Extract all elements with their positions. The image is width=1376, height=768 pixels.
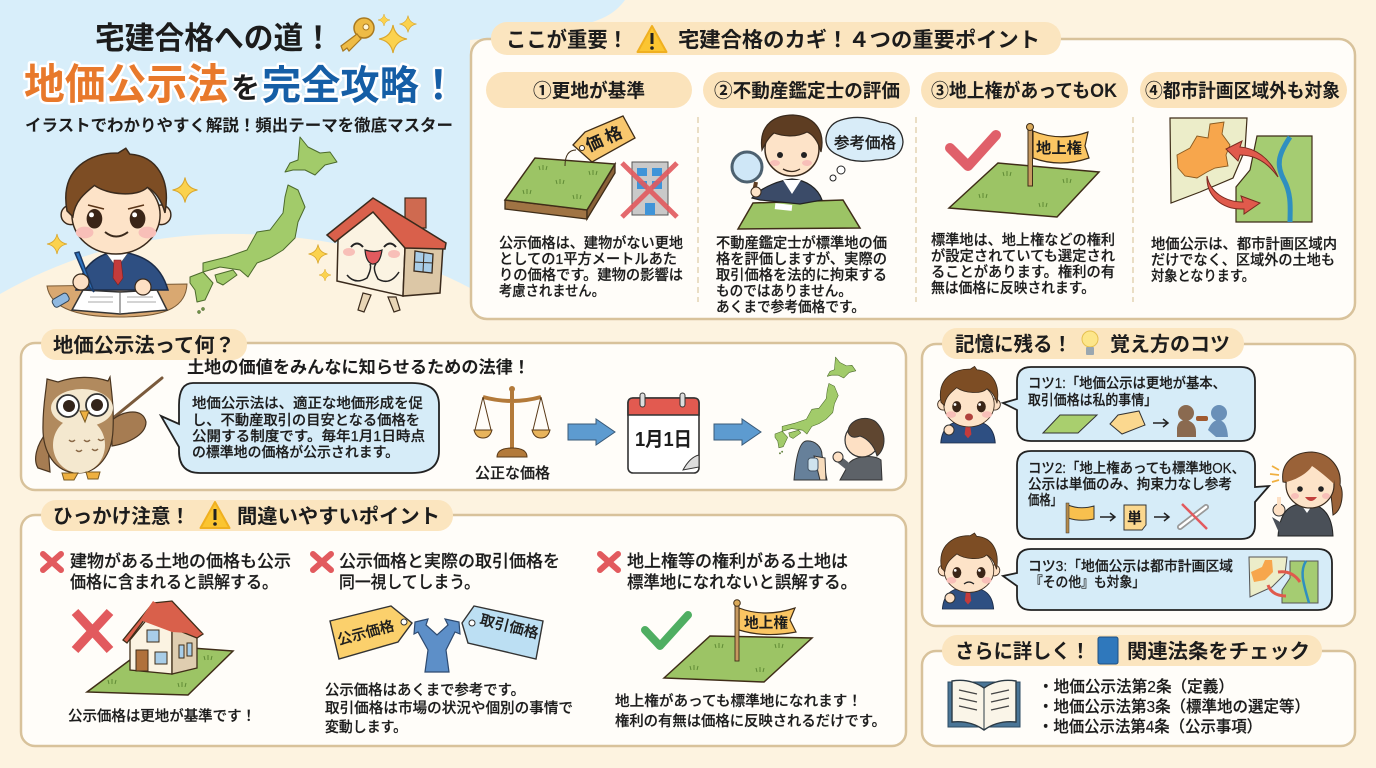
point 3 text: が設定されていても選定され [931, 247, 1115, 265]
callout: law explanation [161, 383, 439, 473]
point 1 text [499, 234, 683, 300]
panel: memory tips [922, 328, 1355, 626]
heading: common mistakes [41, 500, 453, 531]
heading: key points: 宅建合格のカギ！４つの重要ポイント [678, 29, 1040, 52]
tip 1 [938, 366, 1255, 443]
tip 3 [938, 533, 1332, 610]
heading: what is the law: 地価公示法って何？ [53, 334, 235, 357]
icon: calendar 1 January [628, 393, 699, 473]
subtitle: イラストでわかりやすく解説！頻出テーマを徹底マスター [25, 116, 453, 135]
point 4 heading [1140, 72, 1347, 108]
point 1 heading: ①更地が基準 [533, 79, 645, 102]
panel: common mistakes [21, 500, 906, 746]
point 4 text: だけでなく、区域外の土地も [1151, 252, 1335, 269]
mistake 2: 公示価格はあくまで参考です。 [325, 682, 525, 699]
callout: tip 2: コツ2:「地上権あっても標準地OK、 [1028, 460, 1245, 477]
point 2 text [716, 234, 887, 316]
heading: memory tips: 記憶に残る！ [955, 332, 1072, 356]
mistake 3: 地上権があっても標準地になれます！ [615, 692, 862, 710]
point 1 text: りの価格です。建物の影響は [499, 267, 683, 284]
illustration: vacant land with price tag: 価格 [583, 123, 625, 156]
illustration: flag on land with check [949, 124, 1099, 217]
callout: tip 1 [1003, 367, 1255, 441]
point 1 [486, 72, 692, 300]
illustration: two price tags and fork arrow: 公示価格 [336, 617, 397, 649]
point 1 text: 考慮されません。 [499, 283, 605, 300]
hero illustration: smiling house [308, 198, 446, 312]
mistake 3: 標準地になれないと誤解する。 [627, 573, 857, 592]
mistake 2: 取引価格は市場の状況や個別の事情で [325, 699, 573, 717]
title line 2: を [231, 73, 260, 105]
title line 2: 完全攻略！ [262, 64, 458, 108]
illustration: two price tags and fork arrow: 取引価格 [478, 611, 541, 643]
icon: key [341, 18, 374, 51]
mistake 1: 建物がある土地の価格も公示 [70, 551, 291, 571]
callout: law explanation: 公開する制度です。毎年1月1日時点 [192, 428, 425, 445]
arrow [568, 419, 615, 445]
title line 1: 宅建合格への道！ [95, 21, 333, 56]
heading: key points [491, 22, 1061, 55]
illustration: appraiser with magnifier: 参考価格 [834, 134, 896, 152]
point 4 heading: ④都市計画区域外も対象 [1145, 79, 1340, 102]
icon: boy speaking [938, 366, 1000, 443]
list of law articles: ・地価公示法第3条（標準地の選定等） [1038, 698, 1310, 716]
illustration: flag on land with green check: 地上権 [744, 614, 789, 632]
mistake 2: 変動します。 [325, 719, 407, 736]
point 3 text [931, 232, 1115, 297]
heading: related law articles: さらに詳しく！ [955, 640, 1090, 663]
mistake 2: 公示価格と実際の取引価格を [339, 552, 560, 571]
illustration: vacant land with price tag [505, 116, 677, 219]
callout: tip 3 [1003, 549, 1332, 610]
illustration: house on land with cross [75, 601, 233, 695]
point 2 text: 格を評価しますが、実際の [716, 250, 887, 268]
point 3 text: 無は価格に反映されます。 [931, 280, 1095, 297]
heading: common mistakes: 間違いやすいポイント [237, 505, 440, 528]
tip 2 [1017, 451, 1342, 539]
heading: common mistakes: ひっかけ注意！ [53, 505, 190, 528]
list of law articles [1038, 678, 1310, 736]
callout: tip 1: 取引価格は私的事情」 [1028, 392, 1157, 409]
subheading: 土地の価値をみんなに知らせるための法律！ [187, 358, 530, 377]
point 4 text [1151, 235, 1337, 285]
icon: sparkles [378, 14, 416, 53]
point 2 [703, 72, 910, 316]
callout: tip 2: 価格」 [1028, 492, 1062, 509]
point 3 text: ることがあります。権利の有 [931, 263, 1115, 281]
point 2 text: ものではありません。 [716, 283, 852, 300]
callout: law explanation: の標準地の価格が公示されます。 [192, 443, 399, 461]
point 3 text: 標準地は、地上権などの権利 [931, 232, 1115, 249]
illustration: owl teacher [36, 377, 162, 480]
panel: related law articles [922, 635, 1355, 746]
mistake 3: 地上権等の権利がある土地は [627, 551, 848, 571]
point 1 text: 公示価格は、建物がない更地 [499, 234, 683, 252]
point 2 text: 不動産鑑定士が標準地の価 [716, 234, 887, 252]
heading: related law articles: 関連法条をチェック [1127, 639, 1310, 663]
illustration: map and people [775, 357, 884, 480]
callout: law explanation: し、不動産取引の目安となる価格を [192, 412, 420, 429]
scales label: 公正な価格 [475, 465, 550, 482]
point 1 heading [486, 72, 692, 108]
callout: tip 3: コツ3:「地価公示は都市計画区域 [1028, 557, 1233, 575]
callout: tip 2: 公示は単価のみ、拘束力なし参考 [1028, 476, 1232, 493]
title block [24, 14, 458, 135]
illustration: appraiser with magnifier [732, 115, 903, 229]
icon: calendar 1 January: 1月1日 [635, 429, 692, 451]
icon: woman pointing [1270, 452, 1342, 536]
point 3 heading [921, 72, 1128, 108]
panel: what is the law [21, 329, 906, 490]
title line 2: 地価公示法 [24, 61, 228, 108]
point 4 [1140, 72, 1347, 285]
point 3 heading: ③地上権があってもOK [931, 79, 1117, 102]
heading: key points: ここが重要！ [506, 28, 628, 52]
icon: worried boy [938, 533, 1000, 609]
point 2 text: 取引価格を法的に拘束する [716, 267, 887, 284]
point 3 [921, 72, 1128, 297]
callout: tip 3: 『その他』も対象」 [1030, 573, 1145, 591]
mistake 2 [313, 552, 573, 736]
icon: open book [948, 680, 1020, 730]
heading: memory tips [942, 328, 1244, 359]
icon: scales of justice [474, 386, 550, 457]
illustration: city planning maps and arrows [1170, 118, 1312, 222]
heading: memory tips: 覚え方のコツ [1110, 333, 1230, 356]
point 1 text: としての1平方メートルあた [499, 251, 677, 268]
list of law articles: ・地価公示法第4条（公示事項） [1038, 718, 1262, 736]
heading: what is the law [41, 329, 247, 360]
heading: related law articles [942, 635, 1322, 666]
hero illustration: studying boy [47, 148, 198, 317]
callout: tip 2: 単 [1127, 509, 1142, 527]
callout: tip 1: コツ1:「地価公示は更地が基本、 [1028, 374, 1226, 392]
callout: law explanation: 地価公示法は、適正な地価形成を促 [192, 394, 423, 412]
title line 2 [24, 61, 458, 108]
point 4 text: 地価公示は、都市計画区域内 [1151, 235, 1337, 253]
point 2 heading [703, 72, 910, 108]
arrow [714, 419, 761, 445]
mistake 1: 価格に含まれると誤解する。 [70, 573, 278, 592]
panel: four key points [471, 22, 1355, 319]
callout: tip 2 [1017, 451, 1269, 539]
mistake 3 [600, 551, 886, 730]
illustration: two price tags and fork arrow [330, 606, 543, 672]
illustration: flag on land with green check [645, 600, 812, 682]
point 2 text: あくまで参考価格です。 [716, 299, 865, 316]
mistake 1 [43, 551, 291, 725]
illustration: flag on land with check: 地上権 [1036, 139, 1082, 157]
hero illustration: Japan map [190, 137, 337, 313]
point 4 text: 対象となります。 [1151, 267, 1255, 285]
point 2 heading: ②不動産鑑定士の評価 [714, 79, 900, 102]
mistake 1: 公示価格は更地が基準です！ [68, 707, 256, 725]
mistake 3: 権利の有無は価格に反映されるだけです。 [615, 713, 886, 730]
list of law articles: ・地価公示法第2条（定義） [1038, 678, 1234, 696]
mistake 2: 同一視してしまう。 [339, 573, 480, 592]
